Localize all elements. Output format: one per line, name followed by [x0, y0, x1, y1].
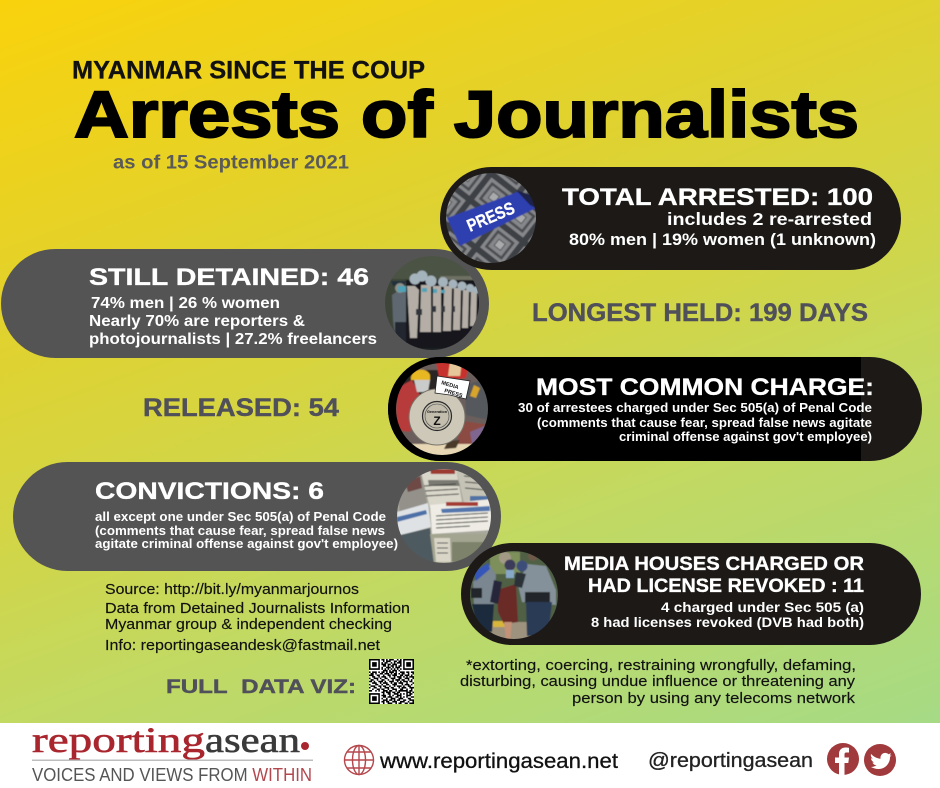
panel: still detained: [1, 249, 489, 358]
logo: reportingasean: asean: [205, 720, 300, 760]
footnote: person by using any telecoms network: [572, 690, 856, 707]
panel: most common charge: [388, 357, 922, 461]
source notes: Source: http://bit.ly/myanmarjournos: [105, 582, 359, 598]
label: full data viz: FULL DATA VIZ:: [166, 677, 356, 698]
icon: press armband photo: PRESS: [464, 198, 518, 236]
heading: [564, 553, 864, 597]
social handle: @reportingasean: [648, 750, 813, 772]
stat: released: RELEASED: 54: [143, 394, 339, 422]
icon: Generation Z illustration: MEDIA: [440, 380, 459, 391]
footer band: [0, 720, 940, 788]
icon: Generation Z illustration: [395, 362, 489, 457]
detail text: agitate criminal offense against gov't employee): [95, 537, 398, 551]
footnote: disturbing, causing undue influence or threatening any: [460, 673, 856, 690]
icon: globe: [344, 746, 374, 774]
heading: TOTAL ARRESTED: 100: [562, 184, 873, 211]
detail text: Nearly 70% are reporters &: [89, 313, 305, 330]
detail text: 8 had licenses revoked (DVB had both): [591, 614, 864, 630]
icon: newspapers photo: [396, 468, 492, 564]
icon: QR code: [369, 659, 414, 704]
detail text: all except one under Sec 505(a) of Penal Code: [95, 510, 386, 524]
panel: total arrested: [440, 167, 901, 270]
heading: HAD LICENSE REVOKED : 11: [588, 575, 864, 597]
panel: convictions: [13, 462, 501, 571]
footnote: *extorting, coercing, restraining wrongfully, defaming,: [466, 657, 856, 674]
icon: Generation Z illustration: Z: [433, 414, 441, 428]
panel: media houses: [461, 543, 921, 645]
detail text: 74% men | 26 % women: [91, 295, 280, 312]
heading: CONVICTIONS: 6: [95, 478, 324, 505]
detail text: 80% men | 19% women (1 unknown): [569, 231, 876, 249]
heading: MOST COMMON CHARGE:: [536, 374, 874, 401]
logo: reportingasean: [32, 720, 313, 785]
footnote: [460, 657, 856, 707]
source notes: Data from Detained Journalists Information: [105, 601, 410, 617]
detail text: [89, 295, 377, 348]
detail text: (comments that cause fear, spread false news: [95, 524, 385, 538]
source notes: Myanmar group & independent checking: [105, 617, 392, 633]
detail text: criminal offense against gov't employee): [619, 430, 872, 444]
title block: [72, 56, 859, 174]
icon: facebook: [827, 743, 859, 775]
source notes: Info: reportingaseandesk@fastmail.net: [105, 638, 380, 654]
heading: STILL DETAINED: 46: [89, 264, 369, 291]
detail text: (comments that cause fear, spread false news agitate: [537, 416, 872, 430]
detail text: [95, 510, 398, 551]
icon: Generation Z illustration: Generation: [427, 410, 448, 414]
detail text: [518, 401, 872, 444]
detail text: photojournalists | 27.2% freelancers: [89, 331, 377, 348]
logo: reportingasean: reporting: [32, 720, 205, 760]
stat: longest held: LONGEST HELD: 199 DAYS: [532, 299, 868, 327]
website: www.reportingasean.net: [379, 750, 618, 773]
date line: as of 15 September 2021: [113, 152, 349, 174]
detail text: [569, 209, 876, 249]
logo: reportingasean: VOICES AND VIEWS FROM WITHIN: [32, 765, 312, 785]
icon: riot police photo: [384, 255, 480, 352]
icon: press armband photo: [445, 172, 540, 264]
icon: arrest photo: [469, 550, 559, 640]
source notes: [105, 582, 410, 654]
detail text: includes 2 re-arrested: [667, 209, 872, 229]
icon: twitter: [864, 744, 896, 776]
detail text: 4 charged under Sec 505 (a): [661, 599, 864, 615]
heading: MEDIA HOUSES CHARGED OR: [564, 553, 864, 575]
icon: Generation Z illustration: PRESS: [443, 388, 463, 399]
detail text: 30 of arrestees charged under Sec 505(a) of Penal Code: [518, 401, 872, 415]
main title: Arrests of Journalists: [74, 77, 859, 151]
detail text: [591, 599, 864, 630]
kicker: Myanmar since the coup: MYANMAR SINCE THE COUP: [72, 56, 425, 84]
